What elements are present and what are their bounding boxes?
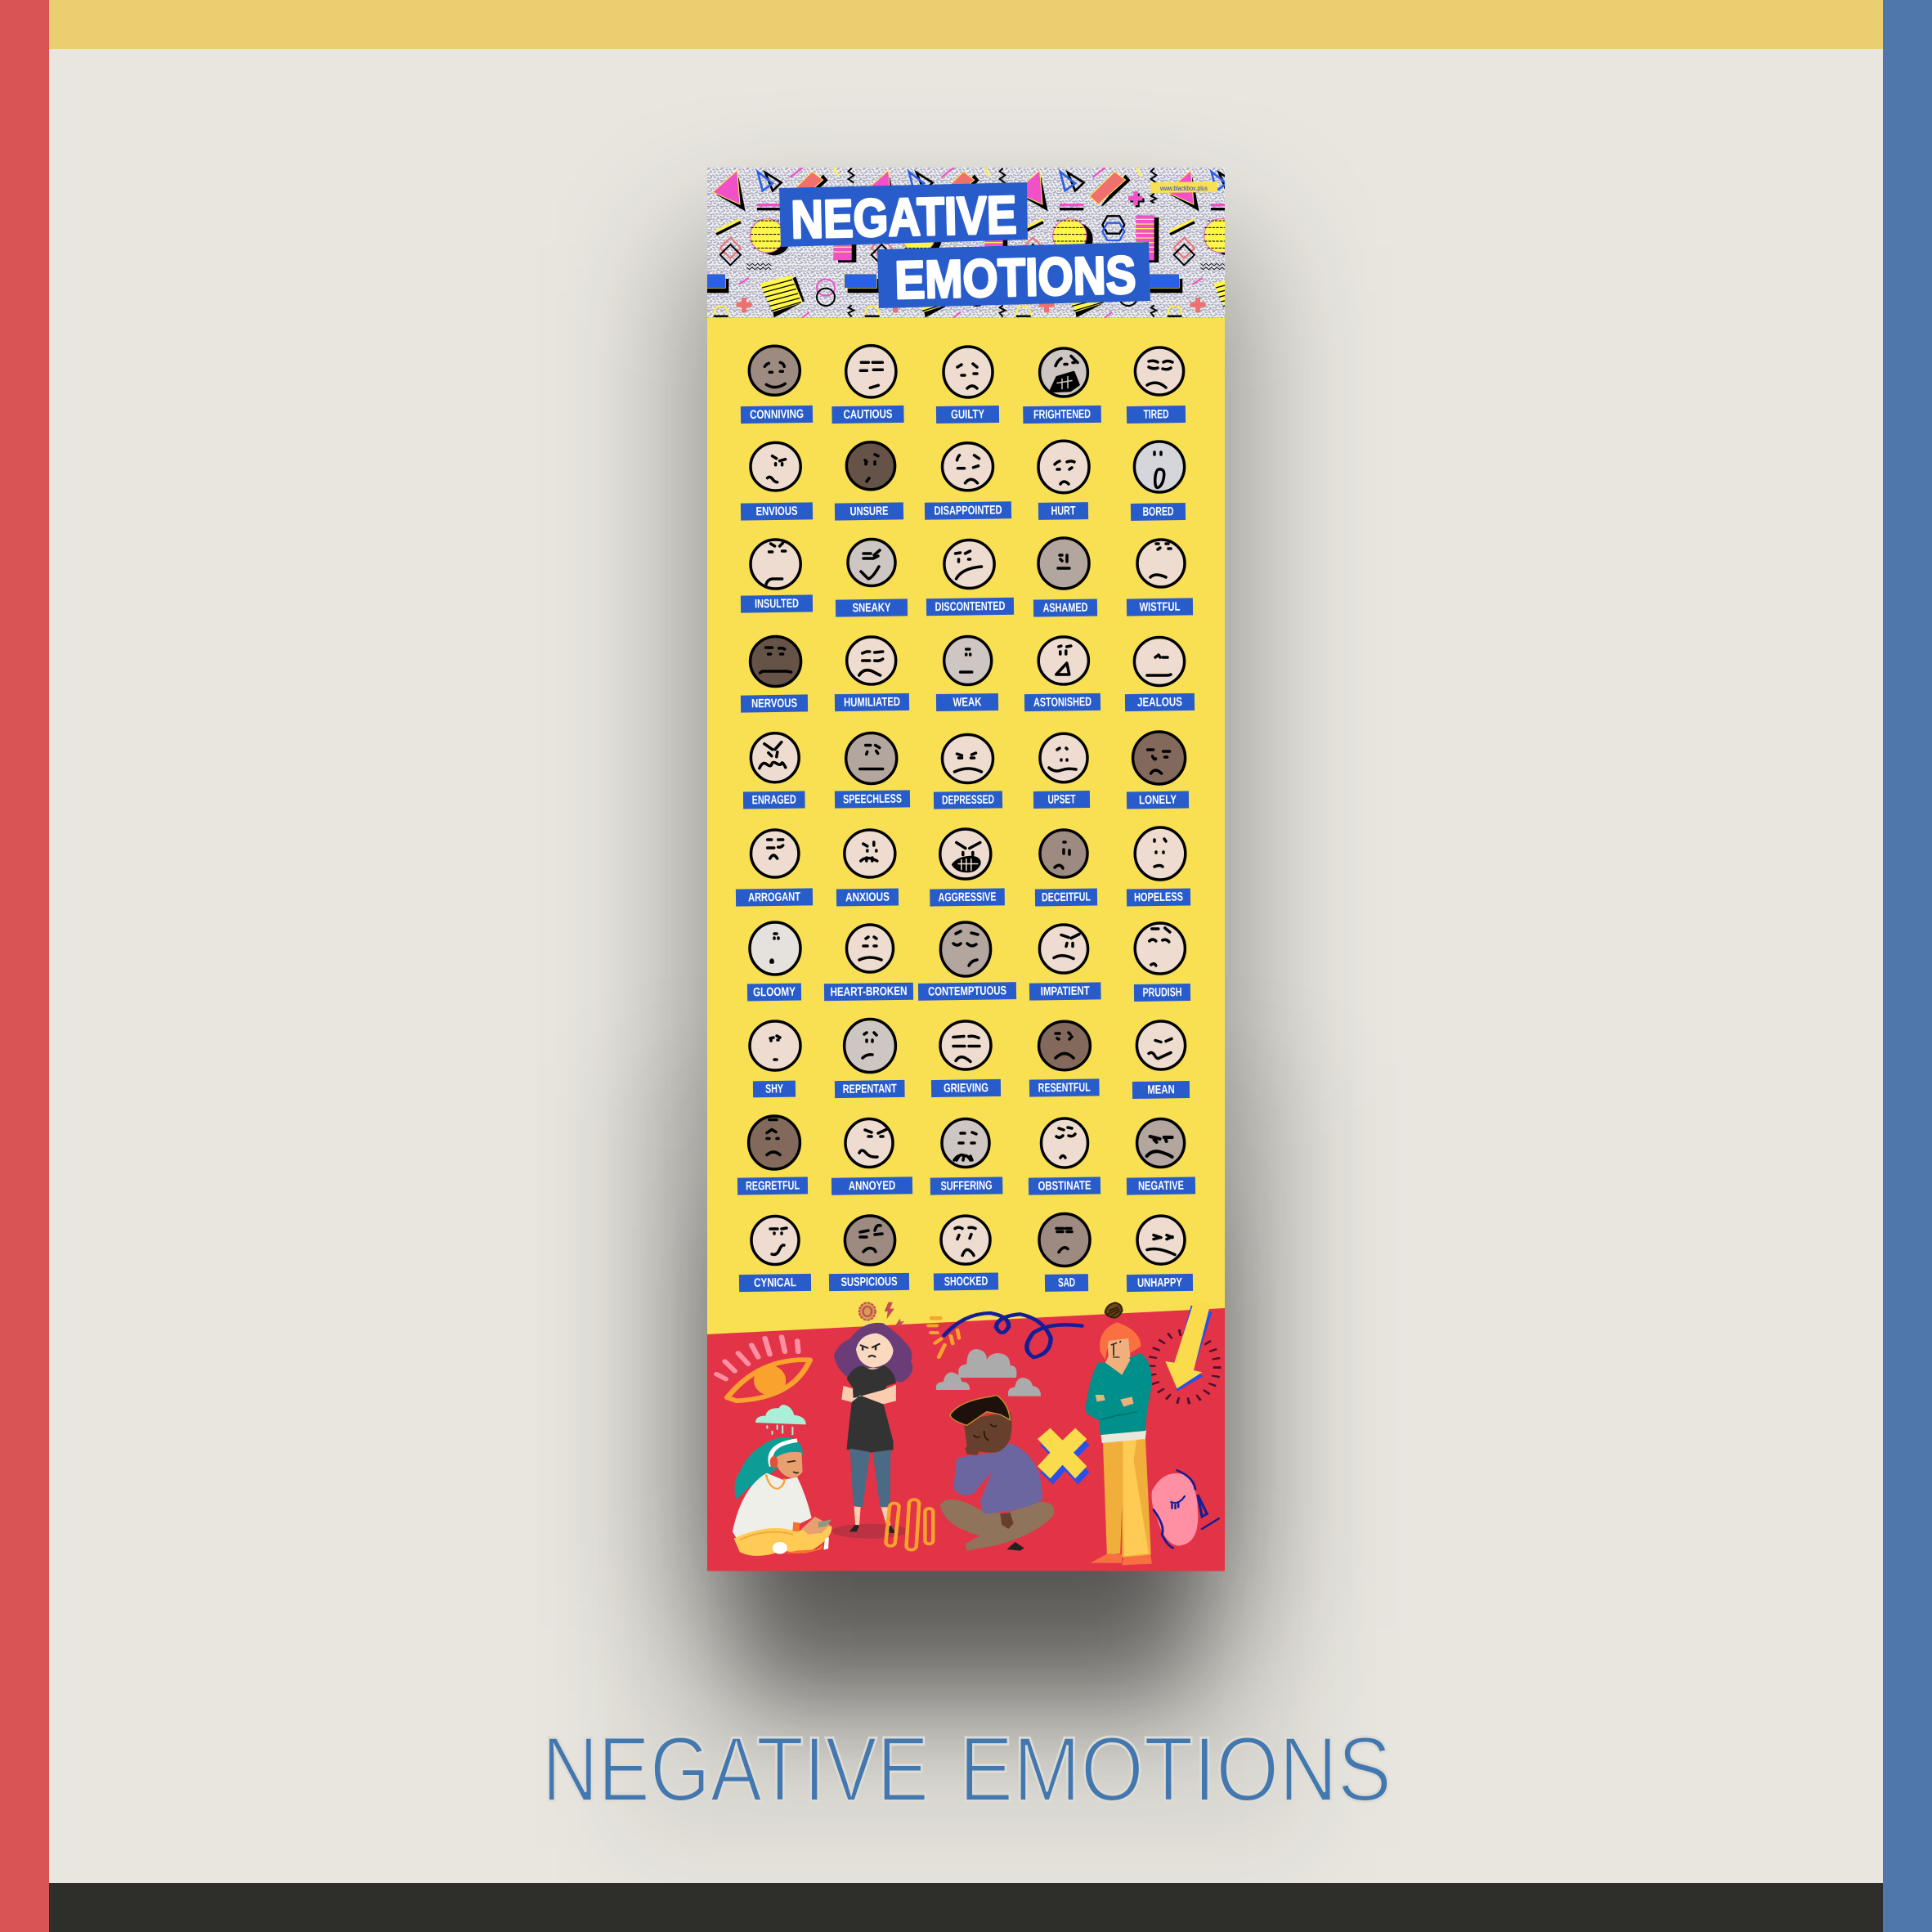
label: unsure: UNSURE (849, 504, 889, 518)
label: unsure (835, 502, 903, 521)
label: regretful (737, 1177, 808, 1195)
icon: orange eye with rays (716, 1337, 810, 1401)
label: repentant (835, 1080, 905, 1098)
label: tired (1127, 406, 1186, 424)
bottom red illustration panel (707, 1300, 1225, 1571)
poster yellow body (707, 318, 1225, 1571)
face: prudish (1135, 923, 1185, 974)
label: depressed: DEPRESSED (942, 793, 994, 807)
face: negative (1137, 1118, 1185, 1168)
heading: EMOTIONS: EMOTIONS (894, 244, 1136, 310)
face: envious (751, 442, 800, 491)
label: disappointed (925, 501, 1011, 520)
label: deceitful (1035, 888, 1097, 907)
label: resentful: RESENTFUL (1038, 1081, 1091, 1095)
label: impatient (1029, 982, 1101, 1001)
label: aggressive (930, 888, 1005, 907)
character: girl with teal hair and headphones (733, 1437, 832, 1556)
label: cautious (832, 406, 904, 424)
label: discontented: DISCONTENTED (935, 599, 1006, 614)
label: anxious (836, 888, 899, 907)
label: bored (1131, 503, 1186, 521)
label: enraged: ENRAGED (752, 793, 796, 807)
label: mean: MEAN (1147, 1083, 1175, 1097)
label: wistful: WISTFUL (1139, 600, 1181, 614)
face: aggressive (940, 829, 991, 879)
face: conniving (749, 346, 800, 395)
label: shy: SHY (765, 1082, 783, 1096)
face: hopeless (1135, 827, 1186, 880)
label: insulted: INSULTED (755, 597, 799, 611)
label: shocked (934, 1272, 998, 1291)
face: repentant (845, 1019, 895, 1073)
label: mean (1132, 1081, 1190, 1099)
label: conniving (741, 406, 813, 424)
face: shy (750, 1021, 800, 1070)
face: wistful (1137, 540, 1185, 587)
face: anxious (845, 830, 895, 877)
face: obstinate (1042, 1118, 1087, 1168)
label: contemptuous: CONTEMPTUOUS (928, 984, 1006, 999)
label: jealous (1125, 693, 1195, 711)
face: enraged (751, 733, 799, 782)
label: frightened: FRIGHTENED (1033, 407, 1091, 422)
label: envious: ENVIOUS (755, 504, 798, 518)
label: wistful (1127, 598, 1193, 616)
character: angry girl with purple hair (832, 1323, 912, 1539)
heading: NEGATIVE: NEGATIVE (791, 185, 1017, 249)
label: conniving: CONNIVING (750, 407, 804, 422)
label: heart-broken: HEART-BROKEN (830, 984, 908, 999)
label: humiliated (835, 693, 909, 711)
label: nervous (741, 694, 808, 713)
label: deceitful: DECEITFUL (1042, 890, 1091, 904)
face: mean (1136, 1021, 1186, 1069)
face: guilty (944, 347, 993, 397)
icon: yellow cross (1038, 1428, 1090, 1485)
website tag: www.blackbox.plus (1159, 185, 1208, 192)
label: cynical (739, 1274, 811, 1292)
face: nervous (751, 636, 801, 687)
face: cynical (751, 1217, 799, 1264)
face: heart-broken (847, 925, 893, 972)
bottom title: EMOTIONS (959, 1719, 1392, 1820)
label: unhappy (1127, 1274, 1193, 1292)
face: upset (1040, 733, 1087, 782)
face: shocked (941, 1216, 990, 1264)
face: hurt (1038, 441, 1089, 493)
label: disappointed: DISAPPOINTED (934, 503, 1002, 518)
label: humiliated: HUMILIATED (844, 695, 900, 710)
label: astonished: ASTONISHED (1033, 695, 1092, 710)
face: resentful (1039, 1021, 1090, 1070)
face: tired (1135, 347, 1184, 395)
face: cautious (846, 346, 896, 397)
icon: arrow with dark ticks (1152, 1300, 1217, 1401)
label: prudish: PRUDISH (1142, 985, 1182, 1000)
face: gloomy (750, 922, 800, 975)
label: sad (1045, 1274, 1088, 1292)
face: ashamed (1038, 538, 1089, 589)
label: grieving (931, 1079, 1001, 1097)
face: sneaky (848, 540, 895, 585)
bottom dark band (49, 1883, 1883, 1932)
face: weak (944, 636, 992, 685)
face: disappointed (942, 443, 993, 491)
face: impatient (1039, 925, 1088, 973)
label: obstinate (1029, 1177, 1100, 1195)
face: grieving (940, 1021, 991, 1069)
face: annoyed (845, 1118, 893, 1168)
face: sad (1039, 1213, 1090, 1266)
face: unhappy (1137, 1216, 1185, 1264)
label: depressed (934, 791, 1002, 809)
label: annoyed: ANNOYED (849, 1179, 895, 1193)
face: suspicious (845, 1216, 895, 1265)
label: suspicious: SUSPICIOUS (840, 1275, 898, 1289)
face: regretful (749, 1116, 800, 1169)
face: discontented (944, 540, 994, 589)
label: hopeless: HOPELESS (1134, 890, 1183, 904)
poster (707, 168, 1225, 1571)
label: guilty (936, 406, 999, 424)
label: hopeless (1127, 888, 1190, 907)
website tag (1150, 182, 1218, 193)
label: repentant: REPENTANT (843, 1082, 897, 1096)
label: arrogant (736, 888, 813, 907)
label: gloomy (747, 984, 801, 1001)
label: suspicious (829, 1273, 909, 1291)
label: upset (1033, 791, 1090, 809)
bottom title (542, 1719, 1392, 1820)
label: speechless: SPEECHLESS (843, 791, 902, 807)
face: insulted (751, 540, 800, 589)
header: memphis pattern (707, 168, 1225, 318)
icon: orange dashes (929, 1318, 959, 1357)
label: envious (741, 502, 813, 521)
label: annoyed (832, 1177, 912, 1195)
icon: orange capsule outlines (885, 1499, 933, 1550)
icon: dark scribble (1105, 1302, 1122, 1318)
label: jealous: JEALOUS (1137, 695, 1182, 710)
label: unhappy: UNHAPPY (1137, 1275, 1182, 1290)
face: jealous (1134, 638, 1185, 685)
label: impatient: IMPATIENT (1041, 984, 1090, 998)
face: suffering (942, 1118, 989, 1168)
label: enraged (743, 791, 805, 809)
label: insulted (741, 594, 813, 613)
label: astonished (1024, 693, 1100, 711)
label: cynical: CYNICAL (754, 1275, 796, 1290)
label: shy (753, 1081, 796, 1097)
label: arrogant: ARROGANT (748, 890, 800, 904)
label: speechless (835, 790, 910, 809)
emotion grid (736, 346, 1195, 1292)
face: speechless (846, 733, 897, 783)
label: lonely (1127, 791, 1189, 809)
label: bored: BORED (1142, 504, 1174, 519)
label: sad: SAD (1058, 1275, 1075, 1290)
icon: pink sleep mask (1152, 1470, 1219, 1548)
label: sneaky: SNEAKY (852, 601, 891, 615)
icon: mint rain cloud (755, 1405, 806, 1435)
label: negative: NEGATIVE (1138, 1179, 1184, 1193)
label: regretful: REGRETFUL (746, 1179, 800, 1193)
face: bored (1134, 442, 1185, 492)
face: depressed (942, 734, 993, 783)
face: frightened (1040, 348, 1087, 397)
label: anxious: ANXIOUS (845, 890, 890, 904)
label: shocked: SHOCKED (944, 1275, 988, 1289)
label: obstinate: OBSTINATE (1038, 1179, 1092, 1193)
icon: scribble and lightning bolts (859, 1302, 904, 1330)
label: ashamed: ASHAMED (1042, 601, 1088, 615)
label: tired: TIRED (1143, 407, 1169, 422)
label: hurt: HURT (1051, 504, 1076, 518)
label: upset: UPSET (1047, 792, 1076, 807)
label: weak (936, 693, 998, 711)
face: arrogant (751, 830, 799, 877)
face: humiliated (847, 637, 896, 684)
label: negative (1127, 1177, 1195, 1195)
face: unsure (846, 442, 895, 490)
label: nervous: NERVOUS (751, 697, 797, 710)
label: aggressive: AGGRESSIVE (938, 890, 997, 904)
face: contemptuous (940, 922, 991, 976)
icon: grey clouds (936, 1349, 1041, 1396)
label: ashamed (1033, 598, 1097, 617)
label: cautious: CAUTIOUS (843, 407, 893, 422)
label: frightened (1023, 406, 1101, 424)
label: weak: WEAK (953, 695, 982, 710)
label: sneaky (836, 598, 908, 617)
icon: blue squiggle (944, 1313, 1082, 1357)
label: lonely: LONELY (1139, 793, 1177, 807)
label: heart-broken (824, 983, 913, 1001)
label: prudish (1134, 984, 1190, 1002)
right blue band (1883, 0, 1932, 1932)
face: lonely (1133, 732, 1186, 784)
character: man with orange hair in teal hoodie (1085, 1322, 1152, 1565)
label: gloomy: GLOOMY (753, 985, 796, 999)
label: resentful (1029, 1078, 1100, 1097)
face: deceitful (1040, 830, 1087, 877)
label: grieving: GRIEVING (944, 1081, 988, 1096)
label: discontented (926, 598, 1014, 616)
face: astonished (1038, 637, 1088, 684)
left red band (0, 0, 49, 1932)
bottom title: NEGATIVE (542, 1719, 929, 1820)
label: suffering (930, 1177, 1002, 1195)
label: guilty: GUILTY (951, 407, 984, 422)
label: hurt (1038, 502, 1088, 520)
poster drop shadow (621, 245, 1311, 1848)
character: seated man holding his head (940, 1396, 1054, 1551)
label: suffering: SUFFERING (940, 1179, 993, 1193)
top yellow band (49, 0, 1883, 49)
label: contemptuous (918, 982, 1016, 1001)
